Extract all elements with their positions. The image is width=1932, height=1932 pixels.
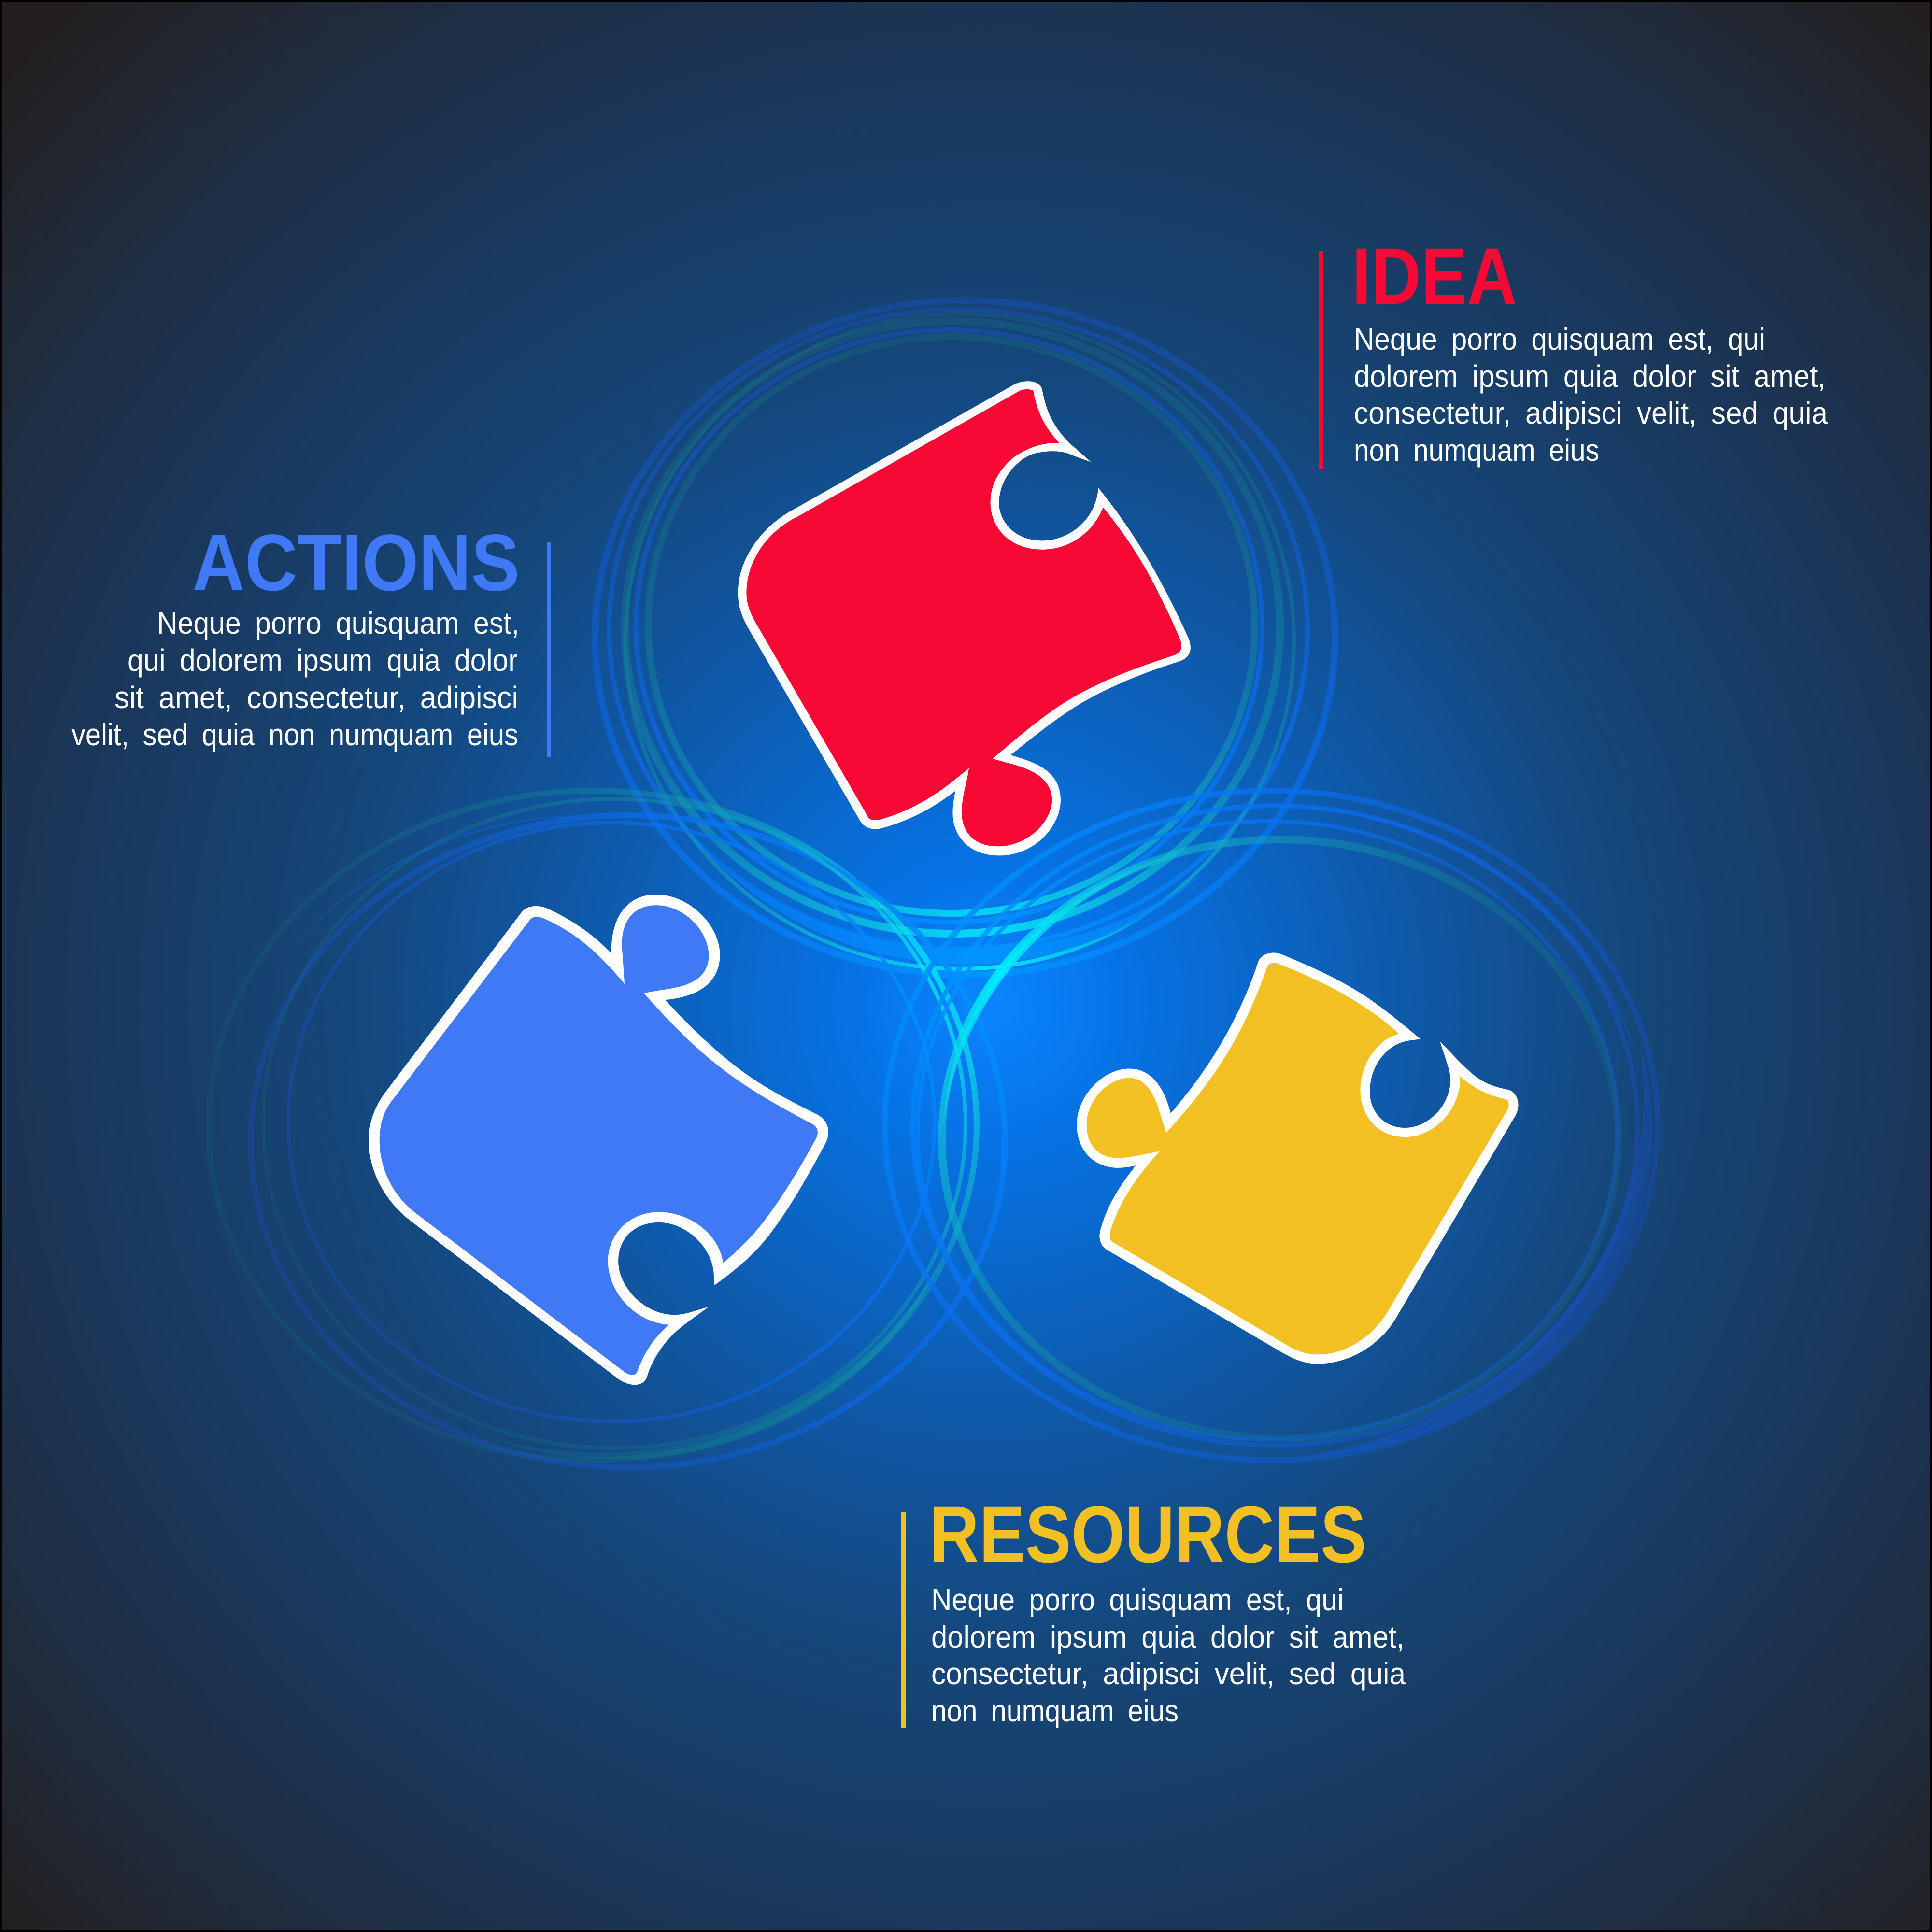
body: actions: Neque porro quisquam est, — [157, 606, 519, 640]
rings: resources — [885, 791, 1658, 1460]
body: actions — [71, 606, 519, 752]
body: actions: qui dolorem ipsum quia dolor — [128, 643, 518, 678]
body: actions: velit, sed quia non numquam eius — [71, 717, 518, 752]
body: resources: dolorem ipsum quia dolor sit amet, — [931, 1619, 1405, 1654]
heading: actions: ACTIONS — [192, 518, 520, 608]
heading: resources: RESOURCES — [929, 1490, 1366, 1579]
body: actions: sit amet, consectetur, adipisci — [114, 680, 518, 715]
rings: idea — [595, 300, 1335, 975]
puzzle piece: actions (blue) — [369, 895, 828, 1385]
body: idea: consectetur, adipisci velit, sed quia — [1354, 396, 1828, 430]
body: idea: non numquam eius — [1354, 433, 1599, 468]
text block: actions — [71, 518, 551, 757]
body: resources: consectetur, adipisci velit, sed quia — [931, 1656, 1406, 1691]
body: resources — [931, 1582, 1406, 1728]
puzzle piece: resources (yellow) — [1077, 953, 1519, 1364]
text block: idea — [1319, 232, 1828, 469]
rings: actions — [209, 791, 1005, 1467]
body: idea: dolorem ipsum quia dolor sit amet, — [1354, 359, 1826, 394]
body: idea — [1354, 322, 1828, 468]
body: resources: Neque porro quisquam est, qui — [931, 1582, 1344, 1617]
heading: idea: IDEA — [1352, 232, 1517, 321]
body: resources: non numquam eius — [931, 1693, 1179, 1728]
body: idea: Neque porro quisquam est, qui — [1354, 322, 1765, 356]
text block: resources — [901, 1490, 1406, 1728]
puzzle piece: idea (red) — [738, 381, 1191, 855]
